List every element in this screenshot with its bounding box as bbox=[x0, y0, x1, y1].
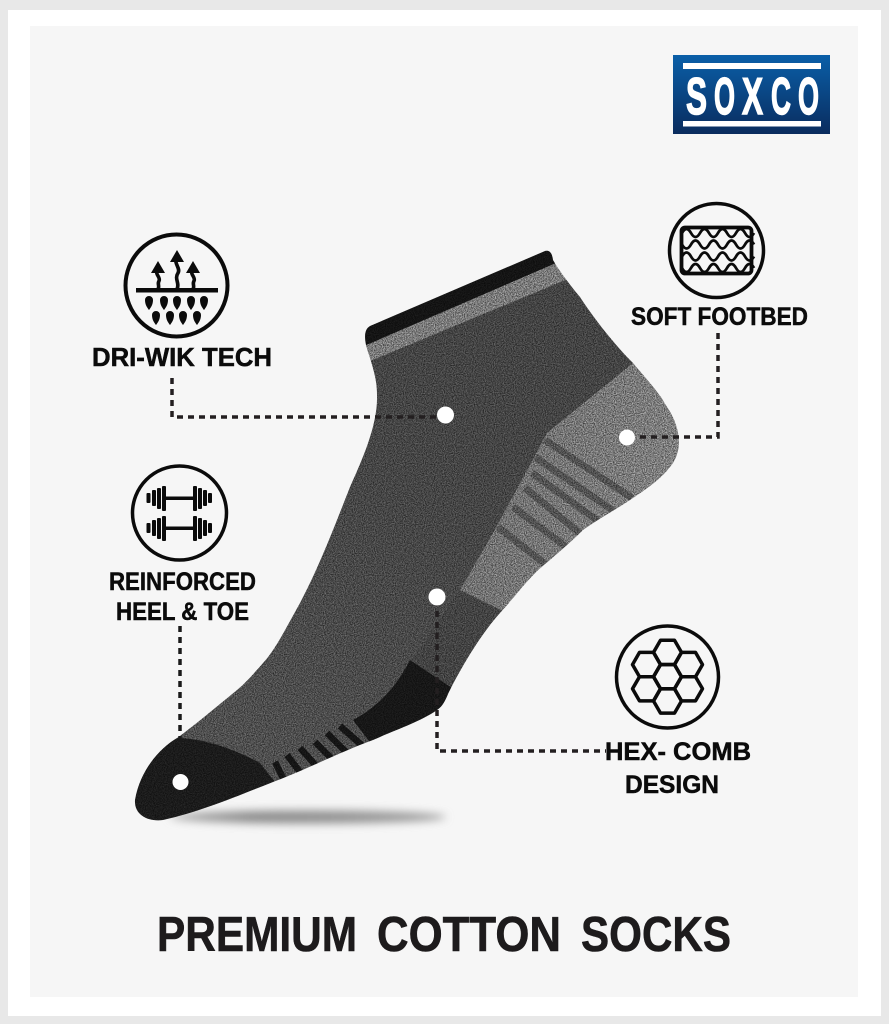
dark sole patch bbox=[413, 590, 502, 686]
sock illustration bbox=[134, 250, 679, 820]
icon: soft footbed bbox=[670, 204, 764, 298]
leader: soft footbed bbox=[632, 333, 718, 437]
icon: dri-wik moisture bbox=[126, 234, 228, 336]
logo: SOXCO bbox=[673, 55, 830, 134]
title: SOCKS bbox=[581, 908, 731, 962]
marker dots bbox=[172, 406, 635, 790]
knit texture bbox=[136, 251, 679, 820]
logo: SOXCO: O bbox=[714, 68, 735, 126]
heel panel bbox=[460, 363, 679, 610]
icon: hexagon comb bbox=[616, 626, 718, 728]
cuff light band bbox=[362, 259, 568, 361]
label: soft footbed: SOFT FOOTBED bbox=[631, 303, 808, 331]
toe cap bbox=[135, 738, 274, 820]
label: hex-comb design: HEX- COMB bbox=[605, 738, 751, 766]
title bbox=[157, 908, 731, 962]
leader: hex-comb design bbox=[437, 600, 606, 751]
sole stripes bbox=[275, 726, 365, 782]
leader: dri-wik tech bbox=[172, 378, 438, 417]
logo: SOXCO: C bbox=[771, 68, 791, 126]
label: hex-comb design: DESIGN bbox=[625, 771, 719, 799]
logo: SOXCO: X bbox=[742, 68, 763, 126]
cuff black band bbox=[360, 245, 556, 346]
leader: reinforced heel and toe bbox=[178, 626, 182, 745]
title: PREMIUM bbox=[157, 908, 357, 962]
label: reinforced heel and toe: REINFORCED bbox=[109, 568, 256, 596]
label: hex-comb design bbox=[605, 738, 751, 799]
arch stripes bbox=[498, 440, 632, 567]
logo: SOXCO: O bbox=[798, 68, 819, 126]
label: reinforced heel and toe bbox=[109, 568, 256, 626]
logo: SOXCO: S bbox=[686, 68, 707, 126]
black arch patch bbox=[353, 660, 452, 745]
shadow under sock bbox=[170, 810, 446, 824]
label: reinforced heel and toe: HEEL & TOE bbox=[116, 598, 249, 626]
title: COTTON bbox=[377, 908, 561, 962]
label: dri-wik tech: DRI-WIK TECH bbox=[92, 342, 272, 372]
icon: dumbbells bbox=[132, 466, 226, 560]
